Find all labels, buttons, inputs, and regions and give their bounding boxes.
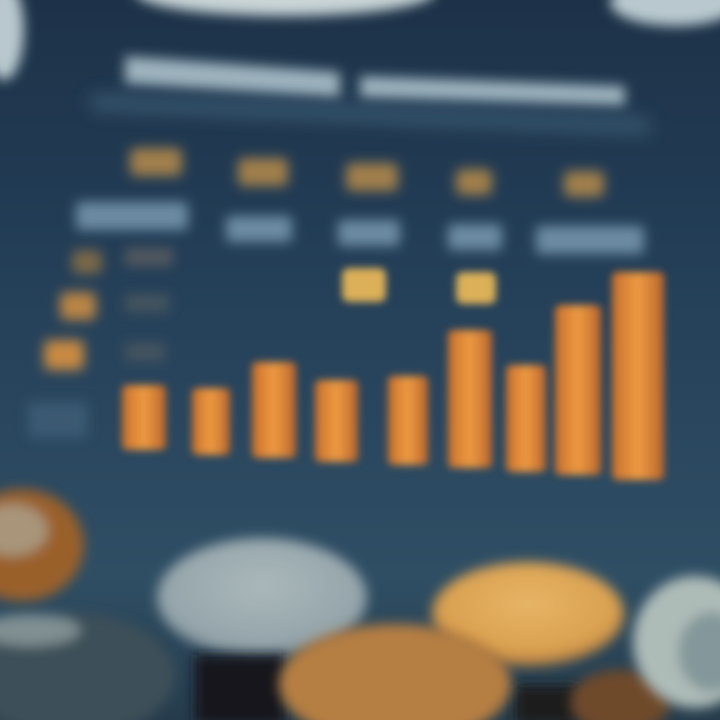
coin: dark shadow centre [195,655,580,720]
left axis markers [28,248,173,438]
coin: dark stack left [0,613,175,720]
coin: gold lower centre [279,624,511,720]
yellow markers [342,268,496,304]
coin: silver right [633,576,720,708]
coin: gold lower right [570,670,670,720]
top highlights [0,0,720,80]
coins [0,489,720,720]
column labels [76,202,644,254]
coin: gold left [0,489,84,601]
coin: silver centre [157,538,367,658]
subtitle [90,94,650,134]
bar chart [122,272,664,480]
column markers [130,148,604,197]
coin: gold right [432,562,624,666]
title [125,56,625,106]
